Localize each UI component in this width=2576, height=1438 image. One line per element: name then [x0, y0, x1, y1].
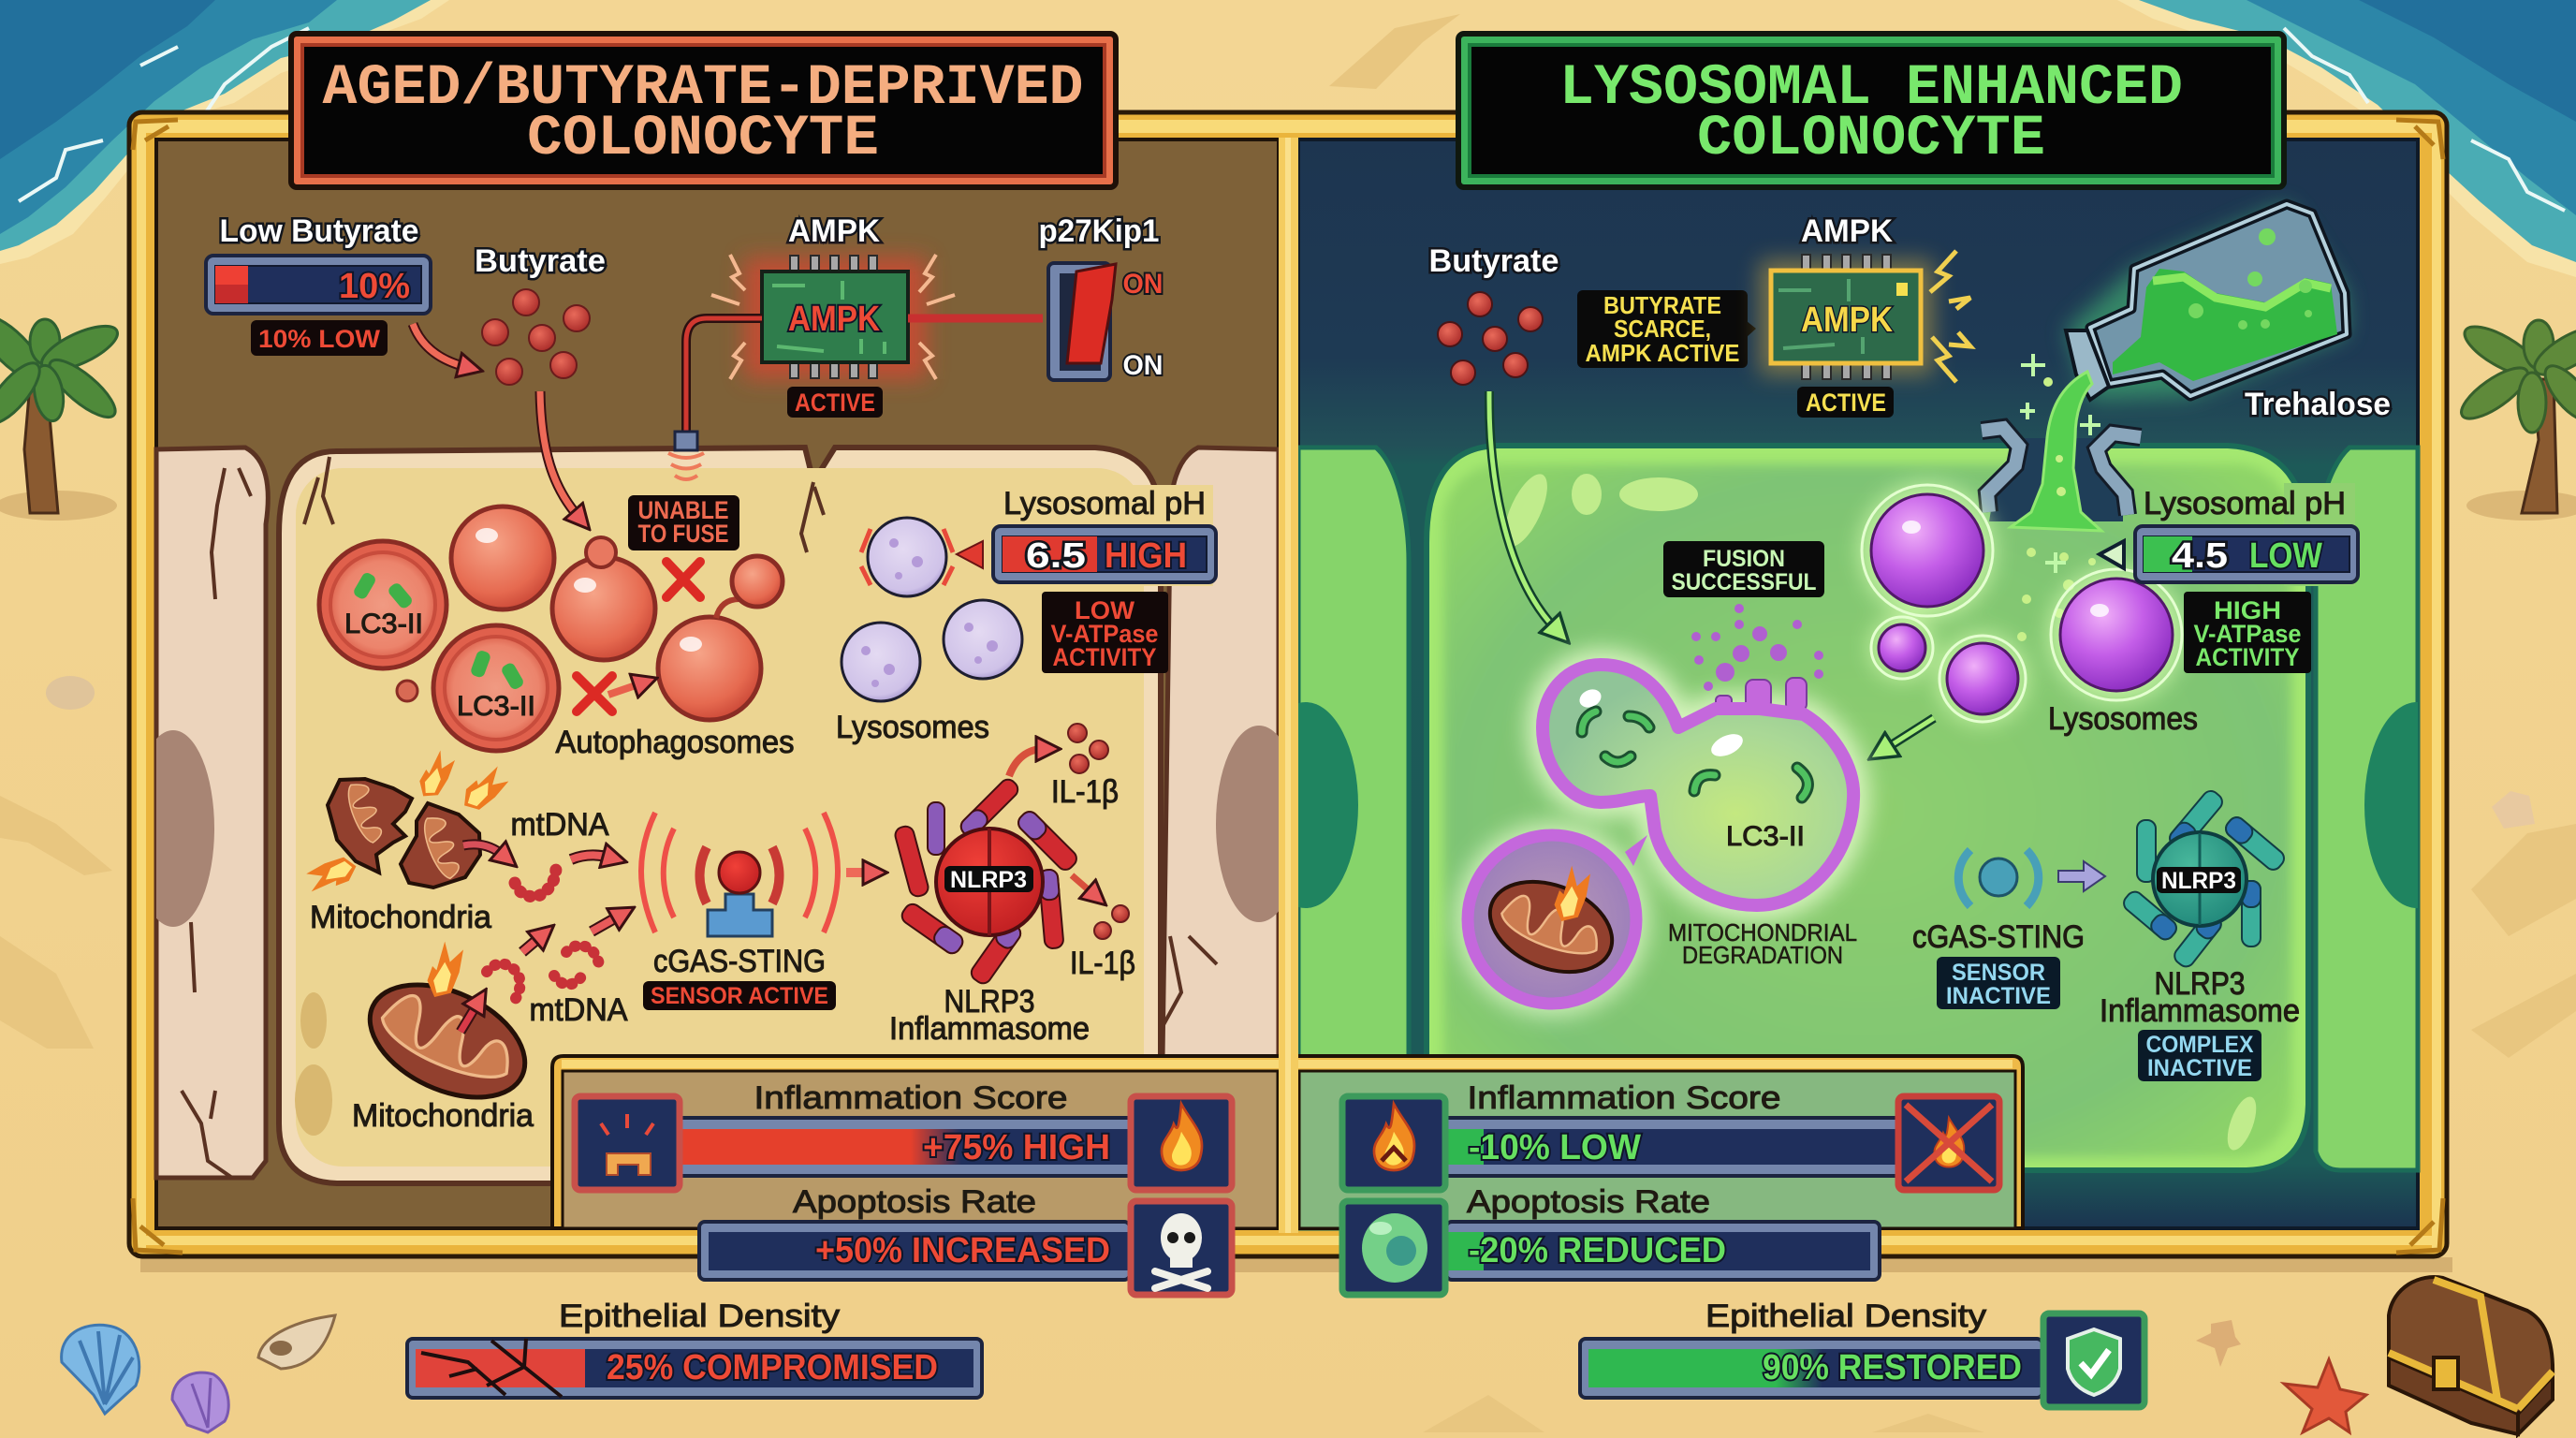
- splash particles: [1691, 604, 1823, 691]
- label: inflammation score: Inflammation Score: [754, 1080, 1067, 1116]
- apoptosis bar: +50% INCREASED: [815, 1231, 1110, 1270]
- fail mark: upper X: [666, 562, 700, 597]
- sensor ball: [1980, 858, 2017, 896]
- cGAS-STING sensor: active: [641, 813, 838, 1010]
- central cell: [1427, 446, 2308, 1170]
- palm tree: left: [0, 306, 124, 521]
- tag: low v-atpase: V-ATPase: [1050, 620, 1159, 648]
- AMPK chip: left: [711, 213, 955, 418]
- icon: skull: [1131, 1201, 1232, 1295]
- tag: butyrate scarce: BUTYRATE: [1603, 291, 1721, 319]
- wire: AMPK to membrane: [668, 318, 762, 479]
- crown buds: [1716, 678, 1807, 714]
- sphere: [2153, 832, 2247, 926]
- label: trehalose: Trehalose: [2245, 387, 2391, 422]
- epithelial density: right: [1580, 1299, 2144, 1407]
- tag: 10% low: 10% LOW: [258, 325, 381, 353]
- tag: sensor active: SENSOR ACTIVE: [651, 983, 828, 1009]
- autophagosome: plain middle: [552, 537, 655, 660]
- tag: high v-atpase: [2184, 592, 2311, 673]
- glow: [1543, 665, 1853, 905]
- inflammation bar: [681, 1118, 1130, 1176]
- membrane: [1543, 665, 1853, 905]
- tag: high v-atpase: V-ATPase: [2194, 620, 2301, 648]
- flames: broken mitochondrion: [300, 748, 512, 903]
- liquid bubbles: [2188, 228, 2312, 330]
- tag: complex inactive: COMPLEX: [2145, 1032, 2254, 1058]
- halo rings: [1862, 485, 2182, 722]
- shell: purple scallop: [172, 1372, 228, 1432]
- pipe: left: [1982, 428, 2019, 512]
- p27Kip1 switch: [1039, 213, 1163, 381]
- butyrate molecules: left: [475, 243, 606, 385]
- icon: shield: [2043, 1313, 2144, 1407]
- label: Epithelial Density: [559, 1299, 840, 1334]
- lysosome: top: [861, 518, 953, 596]
- inflammation bar: -10% LOW: [1469, 1128, 1641, 1167]
- label: cGAS-STING: cGAS-STING: [1912, 919, 2085, 955]
- inflammation bar: +75% HIGH: [923, 1128, 1110, 1167]
- trehalose stream: [2011, 354, 2101, 641]
- autophagosome: plain right: [658, 599, 761, 720]
- frame corner: bottom right: [2396, 1198, 2443, 1253]
- label: lysosomal pH: Lysosomal pH: [2144, 486, 2346, 521]
- tag: low v-atpase: ACTIVITY: [1052, 643, 1157, 671]
- title: left: COLONOCYTE: [527, 107, 879, 171]
- score strip: gold top: [552, 1056, 2023, 1228]
- cracks: [182, 457, 1217, 1178]
- NLRP3 inflammasome: active: [889, 724, 1135, 1047]
- shell: conch: [258, 1315, 335, 1369]
- treasure chest: [2389, 1277, 2553, 1434]
- IL-1β dots upper: [1068, 724, 1108, 773]
- label: inflammation score: Inflammation Score: [1468, 1080, 1780, 1116]
- pointer triangle: [957, 541, 983, 568]
- label: low butyrate: Low Butyrate: [219, 213, 419, 249]
- shell: blue scallop: [62, 1325, 139, 1414]
- butyrate molecules: right: [1428, 243, 1559, 385]
- lysosomes group: right: [1860, 483, 2358, 737]
- starfish: tan: [2196, 1320, 2241, 1367]
- tag: unable to fuse: TO FUSE: [638, 520, 728, 548]
- NLRP3 inflammasome: inactive: [2100, 787, 2300, 1081]
- frame corner: top left: [133, 120, 178, 150]
- starfish: red: [2284, 1359, 2366, 1432]
- label: lysosomes: Lysosomes: [836, 710, 989, 745]
- label: AMPK: AMPK: [1801, 213, 1893, 249]
- inflammation bar: [1446, 1118, 1897, 1176]
- label: Epithelial Density: [1705, 1299, 1986, 1334]
- label: mitochondria lower: Mitochondria: [352, 1098, 534, 1134]
- label: mitochondria top: Mitochondria: [310, 900, 491, 935]
- tag: low v-atpase: [1042, 592, 1168, 673]
- arrow: sensor to NLRP3: [846, 868, 871, 877]
- bolts: [1930, 251, 1970, 382]
- label: LC3-II: LC3-II: [1726, 821, 1805, 852]
- fusion autolysosome: [1455, 604, 1857, 1017]
- bar: [1580, 1339, 2042, 1398]
- channel: trehalose entry: [1982, 428, 2141, 521]
- label: cGAS-STING: cGAS-STING: [653, 944, 826, 979]
- label: AMPK: AMPK: [788, 213, 880, 249]
- tag: butyrate scarce: SCARCE,: [1614, 315, 1711, 343]
- mtDNA strand: top: [515, 866, 556, 897]
- tag: sensor inactive: [1937, 957, 2060, 1009]
- sparkles and particles: [2017, 377, 2096, 641]
- lysosome: medium: [1947, 643, 2018, 714]
- panel fill: [563, 1071, 1278, 1228]
- small vesicle: lower: [397, 681, 417, 701]
- cytoplasm spots: [295, 992, 332, 1136]
- channel gap: [1989, 438, 2123, 521]
- lysosome: lower right: [944, 600, 1022, 679]
- pipe: right: [2097, 433, 2141, 515]
- panel background: [156, 139, 1279, 1228]
- label: lysosomes: Lysosomes: [2048, 701, 2198, 737]
- title: right: COLONOCYTE: [1697, 107, 2045, 171]
- chip traces: [772, 281, 885, 354]
- trehalose flask: [2066, 204, 2347, 400]
- apoptosis bar: [699, 1222, 1130, 1280]
- tag: unable to fuse: [628, 495, 739, 550]
- chip pins: [790, 256, 877, 378]
- red glow: [744, 257, 927, 379]
- pH bar: [993, 526, 1216, 582]
- nucleus right: [1216, 726, 1279, 922]
- sphere seam: [988, 829, 991, 935]
- flask outline: [2090, 204, 2347, 396]
- neighbour cell right: [2316, 448, 2418, 1170]
- autophagosomes group: [319, 495, 794, 760]
- tag: sensor inactive: SENSOR: [1952, 960, 2045, 986]
- cGAS-STING sensor: inactive: [1912, 850, 2105, 1009]
- tag: high v-atpase: ACTIVITY: [2196, 643, 2299, 671]
- label: autophagosomes: Autophagosomes: [556, 725, 794, 760]
- gold frame: [129, 112, 2447, 1256]
- pH bar: HIGH: [1105, 536, 1187, 576]
- highlights: [1576, 686, 1747, 761]
- cytoplasm behind pH label: [1123, 485, 1213, 586]
- score panel: left: [563, 1071, 1278, 1295]
- sensor base: [708, 894, 772, 936]
- signal arcs: [668, 453, 704, 479]
- title: left: AGED/BUTYRATE-DEPRIVED: [322, 56, 1084, 121]
- sphere seam: [2198, 833, 2202, 925]
- tag: sensor inactive: INACTIVE: [1946, 983, 2051, 1009]
- tag: fusion successful: FUSION: [1703, 546, 1785, 572]
- label: mitochondrial degradation: [1668, 918, 1857, 969]
- arrow: lysosomes to fusion: [1885, 718, 1934, 749]
- label: lysosomal pH: Lysosomal pH: [1003, 486, 1206, 521]
- cracks: [421, 1339, 562, 1397]
- chip pins: [1802, 255, 1891, 379]
- title: right: [1458, 34, 2284, 187]
- neighbour cell left: [156, 448, 268, 1178]
- palm tree: right: [2454, 317, 2576, 521]
- chip traces: [1778, 279, 1863, 354]
- pH bar: 4.5: [2172, 536, 2228, 576]
- cytoplasm: [1443, 464, 2291, 1157]
- neighbour cell right: [1161, 448, 1279, 1189]
- frame shadow: [140, 1257, 2452, 1272]
- on label white: ON: [1123, 350, 1163, 381]
- arrow: low to butyrate: [413, 324, 466, 367]
- title: left: [291, 34, 1116, 187]
- icon: healthy cell: [1342, 1201, 1445, 1295]
- lysosome: small: [1879, 624, 1925, 671]
- rock: [2492, 791, 2535, 829]
- arrow: IL-1β upper: [1009, 749, 1044, 776]
- label: mitochondrial degradation: DEGRADATION: [1682, 941, 1843, 969]
- lysosomes group: left: [836, 486, 1216, 745]
- gold divider: [1279, 138, 1298, 1233]
- nucleus right: [2364, 702, 2418, 908]
- liquid surface: [2153, 277, 2331, 307]
- sparkles: [2020, 354, 2100, 573]
- gauge bar: 10%: [339, 267, 410, 306]
- bar: [407, 1339, 982, 1398]
- nucleus left: [1298, 702, 1358, 908]
- chip body: [762, 271, 908, 362]
- mitochondrion: broken: [328, 779, 480, 888]
- title: right: LYSOSOMAL ENHANCED: [1559, 56, 2183, 121]
- label: mitochondrial degradation: MITOCHONDRIAL: [1668, 918, 1857, 946]
- epithelial density: left: [407, 1299, 982, 1398]
- lysosome: large right: [2060, 579, 2173, 691]
- flask glow: [2066, 204, 2347, 400]
- tag: active: ACTIVE: [795, 389, 875, 417]
- tag: butyrate scarce: [1577, 290, 1756, 368]
- label: apoptosis rate: Apoptosis Rate: [793, 1184, 1036, 1220]
- degraded fragments: [1582, 712, 1808, 798]
- switch housing: [1048, 263, 1110, 380]
- tag: high v-atpase: HIGH: [2214, 596, 2281, 624]
- tag: butyrate scarce: AMPK ACTIVE: [1586, 339, 1739, 367]
- sensor ball: [719, 852, 760, 893]
- label: p27Kip1: p27Kip1: [1039, 213, 1159, 249]
- arrow: mtDNA to sensor: [571, 855, 610, 859]
- flask lip: [2066, 330, 2109, 400]
- neighbour cell left: [1298, 448, 1409, 1228]
- nucleus left: [156, 730, 214, 927]
- spokes: [2120, 787, 2288, 970]
- tag: low v-atpase: LOW: [1075, 596, 1135, 624]
- arrows: lower mtDNA: [522, 916, 620, 952]
- wire: AMPK to switch: [908, 315, 1043, 322]
- yellow glow: [1760, 260, 1933, 374]
- autophagosome: plain top: [451, 506, 554, 609]
- tag: 10% low: [251, 320, 388, 356]
- beach decorations: [46, 676, 2553, 1434]
- AMPK chip: right: [1760, 213, 1970, 418]
- ocean: top right: [2117, 0, 2576, 277]
- bar: 90% RESTORED: [1763, 1348, 2022, 1387]
- sensor arcs: [1958, 850, 2039, 906]
- label: NLRP3 inflammasome: Inflammasome: [2100, 993, 2300, 1029]
- apoptosis bar: [1446, 1222, 1880, 1280]
- mitochondrion vesicle: [1455, 822, 1649, 1017]
- pH bar: [2135, 526, 2358, 582]
- label: NLRP3 inflammasome: [889, 984, 1090, 1047]
- tag: complex inactive: [2138, 1030, 2261, 1081]
- pointer triangle: [2100, 541, 2124, 568]
- chip text: AMPK: [788, 300, 880, 339]
- ocean: top left: [0, 0, 449, 264]
- tag: unable to fuse: UNABLE: [638, 496, 728, 524]
- tag: fusion successful: SUCCESSFUL: [1672, 569, 1816, 595]
- lysosome: large top: [1871, 494, 1983, 607]
- bar: 25% COMPROMISED: [607, 1348, 938, 1387]
- score panel: right: [1299, 1071, 2015, 1295]
- icon: gauge: [575, 1096, 680, 1190]
- sensor waves: [641, 813, 838, 932]
- tag: active: ACTIVE: [1806, 389, 1886, 417]
- autophagosome: LC3-II top: LC3-II: [344, 609, 423, 639]
- apoptosis bar: -20% REDUCED: [1469, 1231, 1726, 1270]
- tag: complex inactive: INACTIVE: [2147, 1055, 2252, 1081]
- mtDNA strand: lower: [487, 946, 599, 1000]
- label: apoptosis rate: Apoptosis Rate: [1467, 1184, 1710, 1220]
- label: mtDNA top: mtDNA: [511, 807, 609, 843]
- panel: right lysosomal enhanced colonocyte: [1253, 139, 2469, 1228]
- glow: [1860, 483, 2184, 724]
- glass highlight: [2090, 204, 2347, 396]
- membrane highlights: [1496, 468, 2262, 1153]
- sphere: [936, 829, 1043, 935]
- sparks: [711, 255, 955, 379]
- chip text: AMPK: [1801, 301, 1893, 340]
- spokes: [894, 776, 1080, 987]
- autophagosome: LC3-II bottom: [433, 625, 559, 751]
- central cell membrane: [279, 448, 1161, 1183]
- IL-1β dots lower: [1094, 905, 1129, 939]
- panel background: [1298, 139, 2418, 1228]
- fragment fill: [1582, 712, 1808, 798]
- label: IL-1β lower: IL-1β: [1070, 946, 1135, 981]
- tag: NLRP3: NLRP3: [2161, 868, 2236, 894]
- small vesicle: [732, 556, 783, 607]
- label: mtDNA lower: mtDNA: [530, 992, 628, 1028]
- label: IL-1β upper: IL-1β: [1051, 774, 1119, 810]
- butyrate molecules: left: Butyrate: [475, 243, 606, 279]
- on label red: ON: [1123, 269, 1163, 300]
- chip led: [1896, 283, 1908, 296]
- arrow: butyrate to fusion: [1489, 391, 1556, 629]
- pH bar: LOW: [2249, 536, 2322, 576]
- tag: fusion successful: [1663, 541, 1824, 597]
- autophagosome: LC3-II top: [319, 541, 446, 668]
- icon: small flame: [1342, 1096, 1445, 1190]
- low butyrate gauge: [206, 213, 431, 356]
- pH bar: 6.5: [1026, 536, 1086, 576]
- mitochondrion: lower: [352, 942, 543, 1120]
- frame corner: bottom left: [133, 1198, 183, 1253]
- arrow: IL-1β lower: [1072, 875, 1093, 894]
- fail mark: lower X with arrow: [577, 676, 641, 712]
- arrow: mito to mtDNA: [463, 844, 504, 856]
- frame corner: top right: [2396, 120, 2443, 159]
- mitochondria pathway: left: [300, 748, 628, 1134]
- chip body: [1771, 271, 1921, 363]
- autophagosome: LC3-II bottom: LC3-II: [457, 691, 535, 722]
- rock: small left: [46, 676, 95, 710]
- label: NLRP3 inflammasome: NLRP3: [944, 984, 1035, 1020]
- panel: left aged colonocyte: [132, 139, 1302, 1228]
- tag: NLRP3: NLRP3: [950, 867, 1027, 893]
- cytoplasm behind pH label: [2284, 483, 2355, 586]
- icon: flame: [1131, 1096, 1232, 1190]
- lysosome: lower left: [842, 623, 920, 701]
- cytoplasm: [296, 468, 1144, 1167]
- icon: crossed flame: [1898, 1096, 1999, 1190]
- arrow: sensor to NLRP3: [2058, 861, 2105, 891]
- label: NLRP3 inflammasome: [2100, 966, 2300, 1029]
- panel fill: [1299, 1071, 2015, 1228]
- butyrate molecules: right: Butyrate: [1428, 243, 1559, 279]
- gauge bar: [206, 256, 431, 314]
- arrow: butyrate to autophagosomes: [540, 391, 578, 517]
- switch lever: [1067, 264, 1116, 363]
- label: NLRP3 inflammasome: NLRP3: [2155, 966, 2245, 1002]
- liquid: [2113, 269, 2337, 381]
- label: NLRP3 inflammasome: Inflammasome: [889, 1011, 1090, 1047]
